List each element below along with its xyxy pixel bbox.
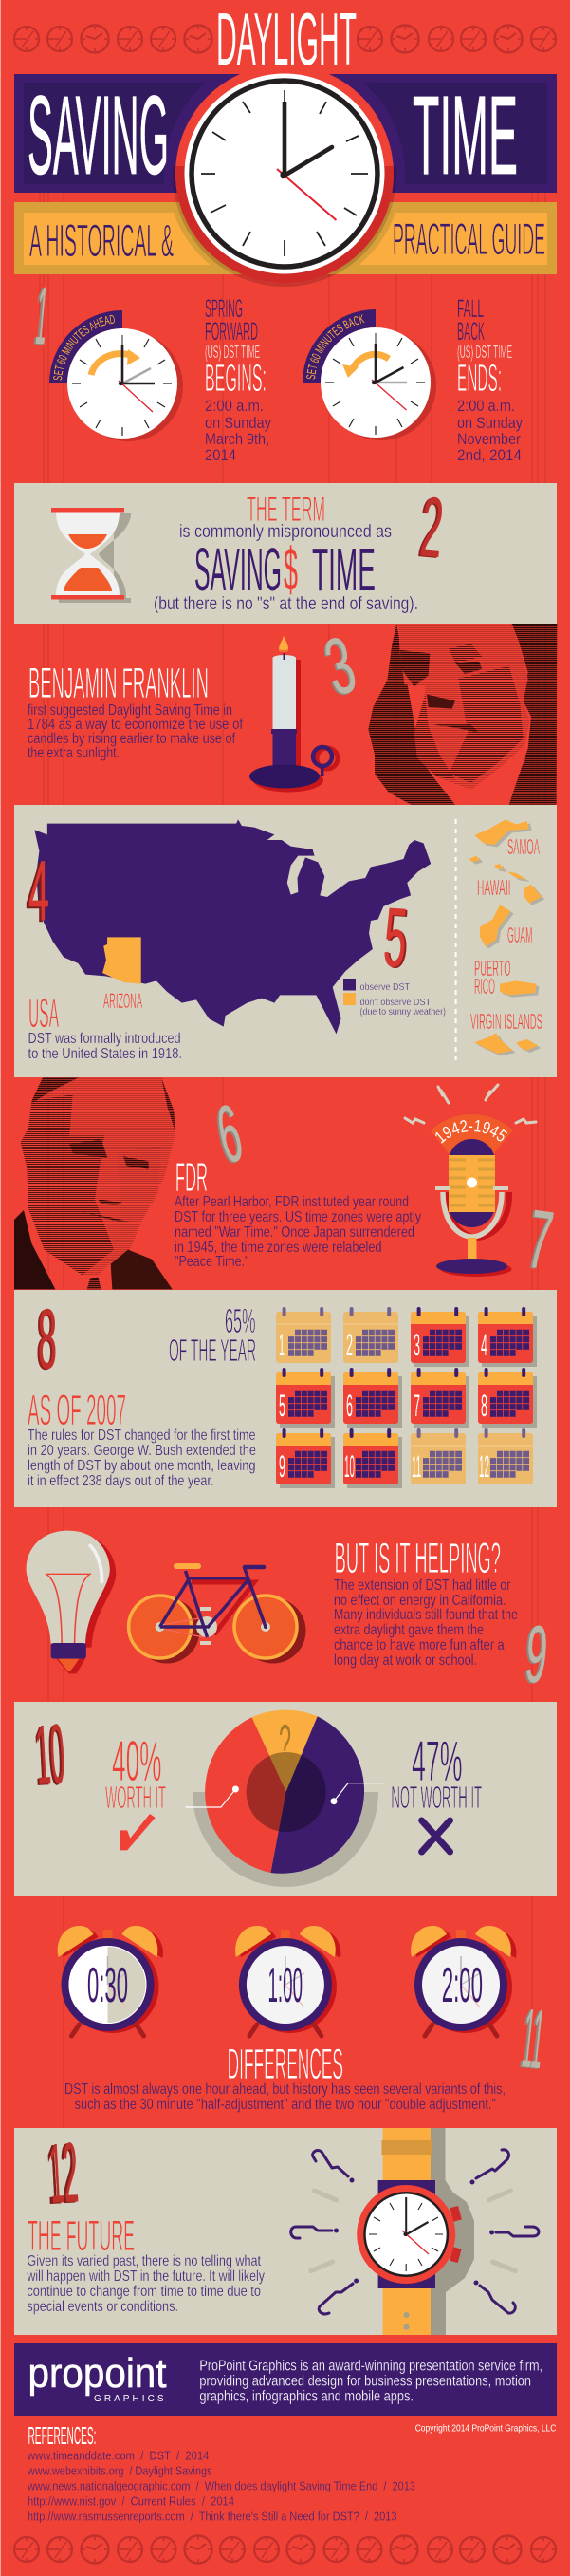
state: arizona bbox=[102, 937, 141, 984]
icon: candle bbox=[249, 636, 338, 792]
text: as of 2007: it in effect 238 days out of the year. bbox=[28, 1473, 214, 1489]
references list: www.timeanddate.com / DST / 2014 bbox=[27, 2449, 209, 2463]
callout right bbox=[330, 1783, 385, 1804]
calendars grid: 12 bbox=[479, 1449, 489, 1484]
text: 1 bbox=[31, 271, 49, 363]
text: saving$ time: SAVING bbox=[194, 535, 282, 604]
text: franklin: the extra sunlight. bbox=[28, 745, 120, 761]
alarm clock 0:30 bbox=[58, 1926, 163, 2036]
logo: graphics: GRAPHICS bbox=[94, 2394, 164, 2404]
panel: pie chart: WORTH IT bbox=[105, 1780, 166, 1815]
spring forward text bbox=[205, 294, 271, 464]
spring forward text: on Sunday bbox=[205, 414, 271, 432]
text: helping bbox=[334, 1577, 518, 1669]
panel: map: 4 bbox=[28, 843, 49, 938]
references list: http://www.nist.gov / Current Rules / 2014 bbox=[28, 2494, 234, 2509]
text: REFERENCES: bbox=[28, 2421, 97, 2450]
panel: fdr bbox=[14, 1077, 558, 1289]
references list bbox=[27, 2449, 415, 2524]
panel: the future: 12 bbox=[45, 2125, 78, 2222]
icon: microphone: 1942-1945 bbox=[435, 1120, 508, 1144]
text: saving$ time: $ bbox=[284, 535, 298, 604]
text: helping: chance to have more fun after a bbox=[334, 1637, 505, 1653]
panel: pie chart: 47% bbox=[412, 1729, 463, 1793]
text: DIFFERENCES bbox=[228, 2040, 343, 2088]
text: differences bbox=[64, 2081, 506, 2113]
spring forward text: 2:00 a.m. bbox=[205, 397, 264, 415]
number 6: 6 bbox=[209, 1090, 248, 1182]
text: fdr: named "War Time." Once Japan surrendered bbox=[175, 1224, 414, 1241]
fall back text: on Sunday bbox=[457, 414, 523, 432]
number 2: 2 bbox=[415, 479, 445, 576]
number 9 bbox=[521, 1609, 551, 1702]
spring forward text: SPRING bbox=[205, 294, 243, 323]
spring forward clock bbox=[49, 310, 183, 441]
text: franklin: candles by rising earlier to make use of bbox=[28, 731, 236, 747]
calendars grid: 11 bbox=[412, 1449, 421, 1484]
gold subtitle banner bbox=[14, 202, 557, 274]
calendars grid: 5 bbox=[279, 1389, 285, 1423]
calendars grid: 9 bbox=[279, 1449, 285, 1484]
island labels bbox=[470, 834, 542, 1034]
banner text bbox=[62, 323, 122, 383]
icon: question mark burst bbox=[291, 2150, 539, 2314]
legend: (due to sunny weather) bbox=[360, 1006, 446, 1017]
icon: wristwatch bbox=[357, 2128, 474, 2335]
panel: the future: THE FUTURE bbox=[28, 2212, 135, 2260]
spring forward text: FORWARD bbox=[205, 317, 258, 345]
text: about: graphics, infographics and mobile apps. bbox=[199, 2389, 414, 2405]
text: franklin: 1784 as a way to economize the use of bbox=[28, 717, 244, 733]
panel: map bbox=[14, 805, 557, 1077]
references list: http://www.rasmussenreports.com / Think there's Still a Need for DST? / 2013 bbox=[28, 2510, 396, 2524]
number 11 bbox=[517, 1990, 548, 2087]
text: franklin bbox=[28, 702, 244, 761]
fall back clock bbox=[303, 309, 436, 440]
icon: sound marks bbox=[405, 1085, 536, 1123]
calendars grid: 7 bbox=[414, 1389, 420, 1423]
calendars grid bbox=[276, 1307, 537, 1488]
text: fdr: After Pearl Harbor, FDR instituted year round bbox=[175, 1194, 409, 1210]
alarm clock 0:30: 0:30 bbox=[87, 1958, 128, 2013]
fall back text: November bbox=[457, 430, 521, 448]
number 5: 5 bbox=[382, 890, 412, 986]
number 2: 2 bbox=[417, 478, 447, 575]
logo: propoint: propoint bbox=[28, 2350, 167, 2397]
calendars grid: 8 bbox=[481, 1389, 487, 1423]
hanging strings bbox=[40, 193, 545, 2141]
panel: calendars: AS OF 2007 bbox=[28, 1386, 126, 1434]
panel: the future bbox=[14, 2124, 557, 2335]
banner text bbox=[315, 322, 376, 383]
number 5: 5 bbox=[381, 889, 410, 985]
number 5 bbox=[380, 889, 412, 986]
calendars grid: 10 bbox=[344, 1449, 355, 1484]
references list: www.webexhibits.org / Daylight Savings bbox=[27, 2464, 212, 2478]
small clock row top bbox=[14, 25, 556, 53]
number 4 bbox=[26, 843, 49, 940]
calendars grid: 3 bbox=[414, 1328, 420, 1362]
panel: pie chart: 10 bbox=[31, 1707, 65, 1803]
pie chart: ? bbox=[279, 1713, 291, 1772]
text: helping: long day at work or school. bbox=[334, 1652, 477, 1669]
alarm clock 1:00 bbox=[235, 1926, 340, 2036]
panel: the future: 12 bbox=[46, 2124, 81, 2221]
panel: the term: THE TERM bbox=[247, 490, 325, 529]
text: helping: The extension of DST had little or bbox=[334, 1577, 511, 1594]
text: as of 2007: length of DST by about one month, leaving bbox=[28, 1458, 256, 1474]
number 3: 3 bbox=[315, 621, 362, 714]
panel: calendars: 65% bbox=[225, 1301, 256, 1340]
portrait: fdr bbox=[14, 1077, 175, 1289]
text: about bbox=[199, 2359, 542, 2405]
icon: bicycle bbox=[129, 1566, 305, 1663]
alarm clock 2:00 bbox=[411, 1926, 516, 2036]
fall back text: 2:00 a.m. bbox=[457, 397, 515, 415]
panel: the term: TIME bbox=[312, 535, 376, 604]
calendars grid: 2 bbox=[346, 1328, 353, 1362]
purple title banner: SAVING bbox=[28, 73, 169, 198]
panel: map: USA bbox=[28, 991, 59, 1036]
calendars grid: 1 bbox=[279, 1328, 285, 1362]
alarm clock 1:00: 1:00 bbox=[267, 1958, 303, 2013]
text: the future: will happen with DST in the future. It will likely bbox=[27, 2268, 265, 2285]
panel: propoint footer bbox=[14, 2343, 557, 2416]
text: fdr: "Peace Time." bbox=[175, 1254, 248, 1270]
icon: hourglass bbox=[51, 508, 131, 603]
number 2 bbox=[415, 478, 447, 576]
fall back text: 2nd, 2014 bbox=[457, 446, 522, 464]
panel: pie chart bbox=[14, 1702, 557, 1896]
panel: map: ARIZONA bbox=[103, 989, 142, 1013]
fall back text: FALL bbox=[457, 294, 484, 323]
spring forward text: 2014 bbox=[205, 446, 236, 464]
legend: observe DST bbox=[360, 981, 410, 993]
island labels: RICO bbox=[474, 974, 495, 999]
panel: calendars: OF THE YEAR bbox=[169, 1333, 256, 1368]
panel: fdr: FDR bbox=[175, 1154, 208, 1201]
number 12 bbox=[44, 2124, 81, 2222]
text: helping: extra daylight gave them the bbox=[334, 1622, 484, 1638]
spring forward text: March 9th, bbox=[205, 430, 269, 448]
icon: x bbox=[422, 1820, 450, 1852]
icon: microphone bbox=[431, 1114, 513, 1277]
number 1 bbox=[31, 270, 51, 363]
panel: calendars bbox=[14, 1290, 557, 1507]
legend: don't observe DST bbox=[360, 997, 431, 1008]
island labels: PUERTO bbox=[474, 956, 510, 980]
text: the future: continue to change from time to time due to bbox=[27, 2284, 261, 2300]
alarm clock 2:00: 2:00 bbox=[442, 1958, 483, 2013]
small clock row bottom bbox=[14, 2536, 556, 2563]
number 8 bbox=[36, 1291, 57, 1387]
panel: benjamin franklin bbox=[28, 619, 557, 805]
icon: check bbox=[120, 1814, 156, 1850]
text: franklin: first suggested Daylight Saving Time in bbox=[28, 702, 232, 719]
text: usa: to the United States in 1918. bbox=[28, 1046, 182, 1062]
islands bbox=[469, 819, 544, 1055]
text: fdr: in 1945, the time zones were relabeled bbox=[175, 1240, 381, 1256]
text: as of 2007: in 20 years. George W. Bush extended the bbox=[28, 1443, 256, 1459]
panel: pie chart: 10 bbox=[33, 1706, 67, 1802]
fall back text bbox=[457, 294, 523, 464]
map: united states bbox=[34, 819, 431, 1034]
panel: calendars: 8 bbox=[36, 1292, 55, 1387]
text: mispronounced: is commonly mispronounced as bbox=[179, 522, 392, 542]
text: 1 bbox=[33, 271, 51, 362]
panel: calendars: 8 bbox=[38, 1291, 57, 1386]
gold subtitle banner: A HISTORICAL & bbox=[29, 216, 174, 267]
panel: pie chart: 40% bbox=[112, 1729, 161, 1793]
text: no s: (but there is no "s" at the end of saving). bbox=[154, 594, 418, 614]
calendars grid: 4 bbox=[481, 1328, 487, 1362]
legend bbox=[343, 979, 446, 1017]
big clock bbox=[173, 63, 396, 287]
text: helping: no effect on energy in California. bbox=[334, 1593, 506, 1609]
panel: benjamin franklin: BENJAMIN FRANKLIN bbox=[28, 659, 209, 707]
text: usa bbox=[28, 1031, 182, 1062]
island labels: HAWAII bbox=[477, 875, 510, 900]
spring forward clock: SET 60 MINUTES AHEAD bbox=[53, 315, 115, 381]
text: helping: Many individuals still found that the bbox=[334, 1607, 518, 1623]
text: the future bbox=[27, 2253, 265, 2315]
text: the future: Given its varied past, there is no telling what bbox=[27, 2253, 261, 2269]
panel: the term bbox=[14, 478, 557, 624]
text: the future: special events or conditions. bbox=[27, 2299, 178, 2315]
number 4: 4 bbox=[26, 845, 47, 940]
text: as of 2007: The rules for DST changed for the first time bbox=[28, 1428, 256, 1444]
fall back clock: SET 60 MINUTES BACK bbox=[306, 314, 364, 380]
icon: light bulb bbox=[27, 1531, 116, 1673]
pie chart bbox=[193, 1710, 378, 1887]
text: fdr: DST for three years. US time zones were aptly bbox=[175, 1209, 421, 1225]
fall back text: BACK bbox=[457, 317, 485, 345]
calendars grid: 6 bbox=[346, 1389, 353, 1423]
number 3: 3 bbox=[316, 619, 364, 712]
text: BEGINS: bbox=[205, 356, 267, 400]
number 6: 6 bbox=[211, 1088, 249, 1181]
number 10 bbox=[31, 1706, 67, 1803]
text: usa: DST was formally introduced bbox=[28, 1031, 180, 1047]
number 6 bbox=[209, 1088, 249, 1182]
text: fdr bbox=[175, 1194, 421, 1270]
year banner bbox=[431, 1114, 513, 1153]
callout left bbox=[186, 1786, 239, 1807]
portrait: franklin bbox=[368, 624, 557, 805]
references list: www.news.nationalgeographic.com / When does daylight Saving Time End / 2013 bbox=[27, 2479, 415, 2493]
text: as of 2007 bbox=[28, 1428, 256, 1489]
spring forward text: (US) DST TIME bbox=[205, 343, 260, 362]
